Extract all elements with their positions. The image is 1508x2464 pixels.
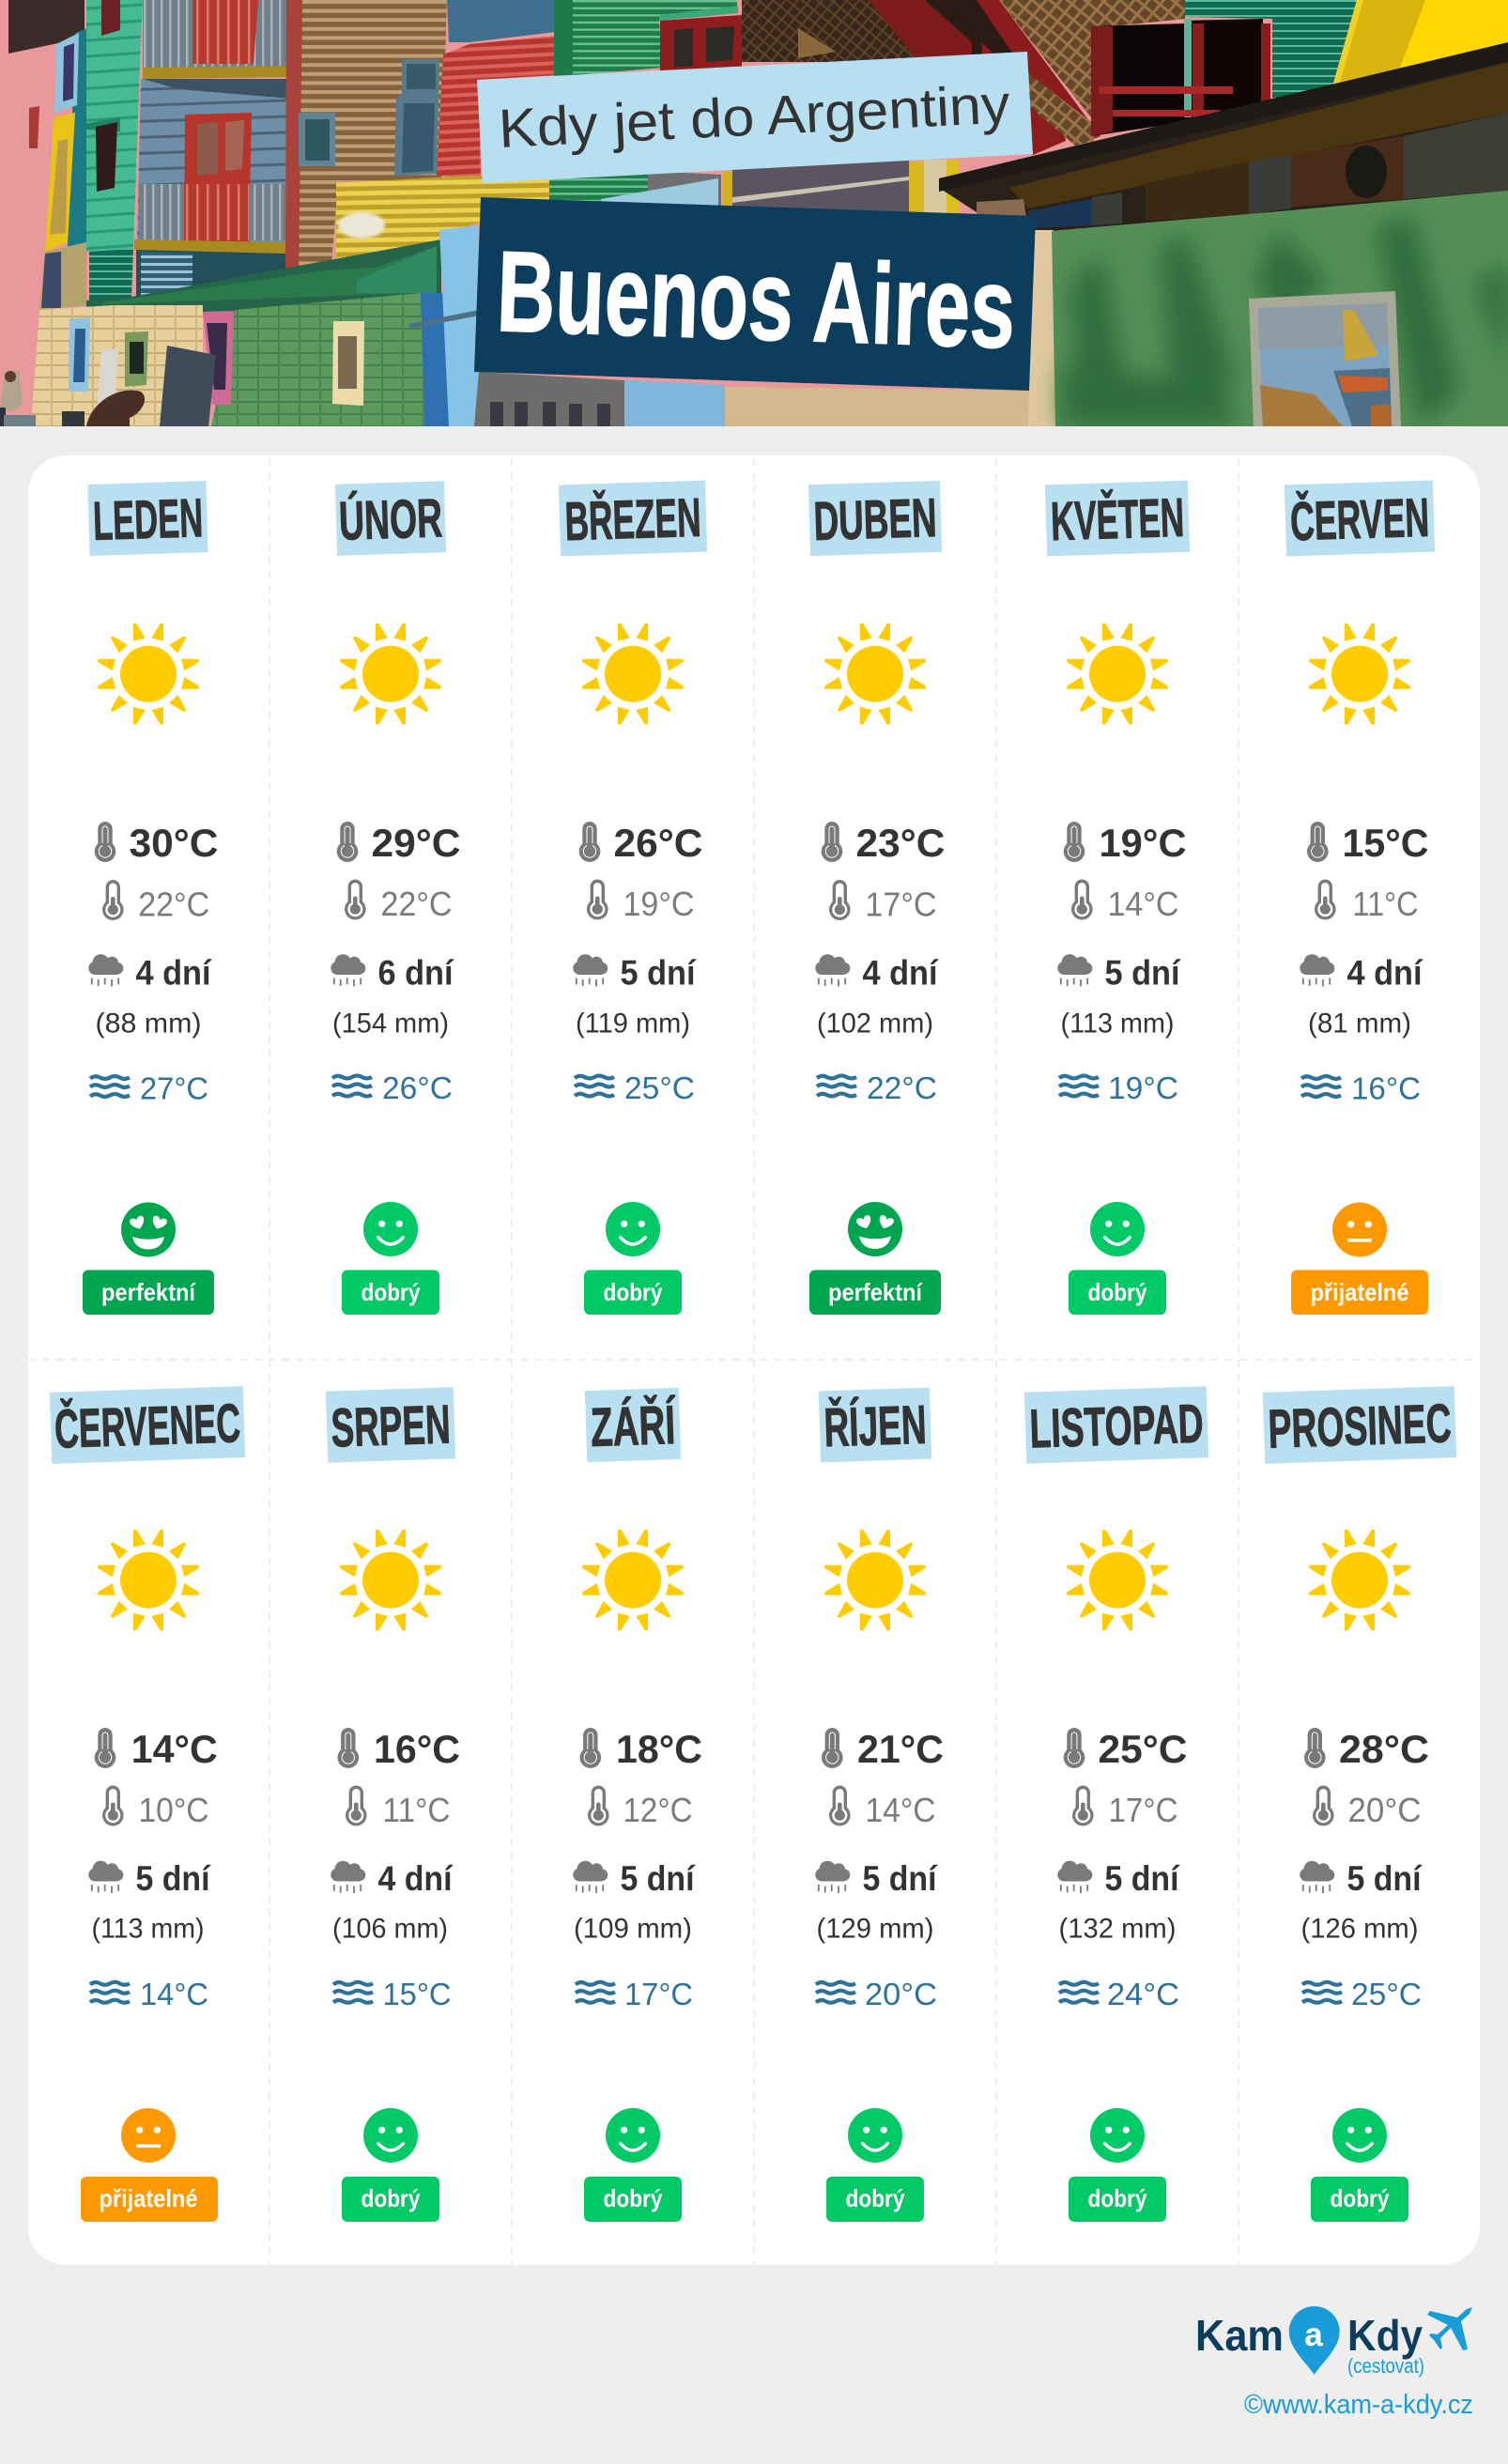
sea temperature [1059,1977,1179,2011]
icon: sun [824,1530,926,1630]
month label [335,481,446,556]
sea temperature [1302,1977,1422,2011]
sea temperature: 25°C [624,1070,695,1105]
rain days [331,1859,454,1898]
rating badge: dobrý [1330,2184,1390,2212]
sea temperature [576,1977,693,2011]
icon: sun [1309,1530,1410,1630]
icon: face good [1090,2108,1145,2163]
logo: Kam a Kdy (cestovat) [1195,2306,1472,2378]
icon: face perfect [848,1202,902,1256]
panel: červen [1285,481,1435,1315]
rain days: 5 dní [620,954,697,992]
max temperature: 14°C [131,1727,218,1771]
min temperature: 12°C [623,1791,693,1829]
rating badge [83,1270,214,1315]
icon: face good [1332,2108,1387,2163]
min temperature [102,880,209,924]
sea temperature: 22°C [867,1070,937,1105]
icon: map pin with letter a: a [1304,2317,1323,2353]
panel: květen [1045,481,1190,1315]
panel: listopad [1024,1386,1208,2222]
min temperature [1071,879,1179,923]
icon: sun [582,624,684,724]
logo tagline: (cestovat) [1347,2354,1424,2378]
precipitation: (109 mm) [574,1914,692,1944]
icon: airplane [1427,2307,1472,2350]
rating badge: dobrý [361,2184,421,2212]
min temperature [102,1786,208,1829]
max temperature: 30°C [130,821,218,865]
rain days: 5 dní [1346,1859,1423,1898]
max temperature: 21°C [857,1727,944,1771]
icon: sun [340,1530,441,1630]
icon: face perfect [121,1202,176,1256]
icon: sun [824,624,926,724]
icon: map pin with letter a [1289,2306,1340,2375]
min temperature [1072,1786,1177,1829]
max temperature: 23°C [856,821,945,865]
rating badge: perfektní [828,1278,923,1306]
min temperature [345,879,453,923]
rating badge: přijatelné [100,2184,197,2212]
month label [50,1386,245,1464]
rating badge: perfektní [101,1278,196,1306]
month label [808,481,942,556]
precipitation: (102 mm) [817,1009,933,1039]
month label: SRPEN [331,1394,452,1459]
banner photo: colourful houses of La Boca [0,0,1508,426]
precipitation: (129 mm) [817,1914,933,1944]
month label [1024,1386,1208,1464]
month label [326,1387,455,1463]
rain days: 4 dní [862,954,939,992]
precipitation: (126 mm) [1301,1914,1418,1944]
icon: face good [363,2108,418,2163]
rain days [1057,1859,1180,1898]
sea temperature [90,1070,208,1106]
icon: face acceptable [1332,1202,1387,1256]
sea temperature: 26°C [382,1070,453,1105]
panel: leden [83,481,218,1315]
rating badge: dobrý [1087,1278,1147,1306]
min temperature: 11°C [1352,885,1418,923]
icon: sun [1309,624,1410,724]
sea temperature [90,1977,208,2011]
sea temperature: 16°C [1351,1070,1421,1106]
rain days [815,954,939,992]
icon: sun [1067,1530,1168,1630]
min temperature: 14°C [1108,885,1179,923]
min temperature: 19°C [623,885,695,923]
max temperature: 19°C [1099,821,1187,865]
precipitation: (88 mm) [96,1009,201,1039]
column and row dividers [28,458,1480,2265]
month label: ÚNOR [338,487,443,552]
precipitation: (106 mm) [332,1914,448,1944]
rating badge [584,2177,682,2222]
sea temperature [816,1977,937,2011]
rain days: 4 dní [377,1859,454,1898]
rating badge: dobrý [845,2184,905,2212]
subtitle tag: Kdy jet do Argentiny: Kdy jet do Argentiny [497,73,1011,160]
title tag: Buenos Aires: Buenos Aires [495,227,1017,372]
sea temperature [333,1977,451,2011]
rain days: 4 dní [135,954,212,992]
panel: říjen [815,1388,944,2222]
icon: sun [1067,624,1168,724]
rating badge [1291,1270,1428,1315]
month label: DUBEN [813,487,938,552]
panel: climate table card [28,455,1480,2265]
icon: face good [606,1202,660,1256]
rating badge: dobrý [603,1278,663,1306]
rating badge [81,2177,218,2222]
max temperature: 29°C [372,821,460,865]
min temperature [587,879,695,923]
icon: face acceptable [121,2108,176,2163]
sea temperature [1301,1070,1421,1106]
rain days: 5 dní [862,1859,938,1898]
icon: face good [606,2108,660,2163]
panel: srpen [326,1387,460,2222]
icon: sun [98,624,199,724]
min temperature: 11°C [383,1791,451,1829]
min temperature [829,880,937,924]
max temperature [580,1727,702,1771]
precipitation: (81 mm) [1308,1009,1411,1039]
max temperature: 26°C [614,821,702,865]
precipitation: (119 mm) [576,1009,690,1039]
rain days: 5 dní [1104,954,1181,992]
month label: ČERVENEC [54,1393,241,1460]
month label [87,481,208,556]
sea temperature [332,1070,453,1105]
sea temperature: 17°C [624,1977,693,2011]
month label: LISTOPAD [1029,1393,1205,1460]
rain days [1057,954,1181,992]
min temperature: 22°C [138,885,209,924]
rain days: 5 dní [1104,1859,1180,1898]
rain days [88,1859,211,1898]
min temperature: 20°C [1348,1791,1422,1829]
sea temperature: 20°C [865,1977,937,2011]
precipitation: (113 mm) [92,1914,205,1944]
min temperature: 17°C [866,885,937,924]
max temperature: 18°C [616,1727,702,1771]
rain days [573,1859,696,1898]
sea temperature: 27°C [140,1070,208,1106]
panel: prosinec [1263,1386,1456,2222]
month label [559,481,707,556]
precipitation: (132 mm) [1059,1914,1176,1944]
rain days [573,954,697,992]
panel: duben [808,481,945,1315]
logo word Kam: Kam [1195,2311,1284,2360]
month label [1045,481,1190,556]
rating badge [1069,1270,1166,1315]
rating badge [342,1270,439,1315]
panel: červenec [50,1386,245,2222]
website copyright: ©www.kam-a-kdy.cz [1244,2390,1473,2420]
max temperature: 16°C [374,1727,460,1771]
month label: ŘÍJEN [823,1394,928,1458]
sea temperature [817,1070,937,1105]
month label: KVĚTEN [1050,487,1185,552]
icon: sun [582,1530,684,1630]
max temperature: 28°C [1339,1727,1429,1771]
min temperature [588,1786,693,1829]
precipitation: (113 mm) [1061,1009,1174,1039]
icon: sun [98,1530,199,1630]
rain days [331,954,454,992]
rating badge [826,2177,924,2222]
sea temperature: 15°C [383,1977,451,2011]
rating badge [342,2177,439,2222]
month label: BŘEZEN [564,487,702,552]
precipitation: (154 mm) [332,1009,449,1039]
rain days [88,954,212,992]
rating badge: dobrý [603,2184,663,2212]
rain days: 4 dní [1346,954,1423,992]
min temperature: 14°C [866,1791,935,1829]
icon: face good [1090,1202,1145,1256]
rain days: 5 dní [135,1859,211,1898]
min temperature [829,1786,935,1829]
max temperature: 15°C [1343,821,1429,865]
min temperature: 10°C [139,1791,208,1829]
panel: září [573,1388,702,2222]
panel: březen [559,481,707,1315]
min temperature: 22°C [381,885,453,923]
rain days [815,1859,938,1898]
sea temperature [1059,1070,1178,1105]
max temperature [95,1727,218,1771]
min temperature [346,1786,451,1829]
icon: sun [340,624,441,724]
rating badge: přijatelné [1311,1278,1408,1306]
sea temperature: 19°C [1108,1070,1178,1105]
min temperature [1315,879,1418,923]
sea temperature: 25°C [1351,1977,1422,2011]
rain days [1300,1859,1423,1898]
rating badge: dobrý [1087,2184,1147,2212]
rain days [1300,954,1423,992]
rating badge: dobrý [361,1278,421,1306]
rating badge [1311,2177,1408,2222]
max temperature: 25°C [1099,1727,1187,1771]
panel: únor [331,481,460,1315]
month label [1285,481,1435,556]
rain days: 6 dní [377,954,454,992]
month label [819,1388,931,1462]
rain days: 5 dní [620,1859,696,1898]
title tag: Buenos Aires [474,197,1036,391]
sea temperature: 24°C [1107,1977,1179,2011]
rating badge [584,1270,682,1315]
min temperature [1313,1786,1422,1829]
max temperature [822,1727,944,1771]
logo word Kdy: Kdy [1347,2311,1423,2360]
max temperature [338,1727,460,1771]
min temperature: 17°C [1108,1791,1177,1829]
sea temperature: 14°C [140,1977,208,2011]
subtitle tag: Kdy jet do Argentiny [477,52,1033,183]
rating badge [809,1270,941,1315]
month label: LEDEN [92,487,204,552]
month label: ZÁŘÍ [590,1394,677,1458]
month label [585,1388,681,1462]
icon: face good [363,1202,418,1256]
sea temperature [575,1070,695,1105]
rating badge [1069,2177,1166,2222]
icon: face good [848,2108,902,2163]
